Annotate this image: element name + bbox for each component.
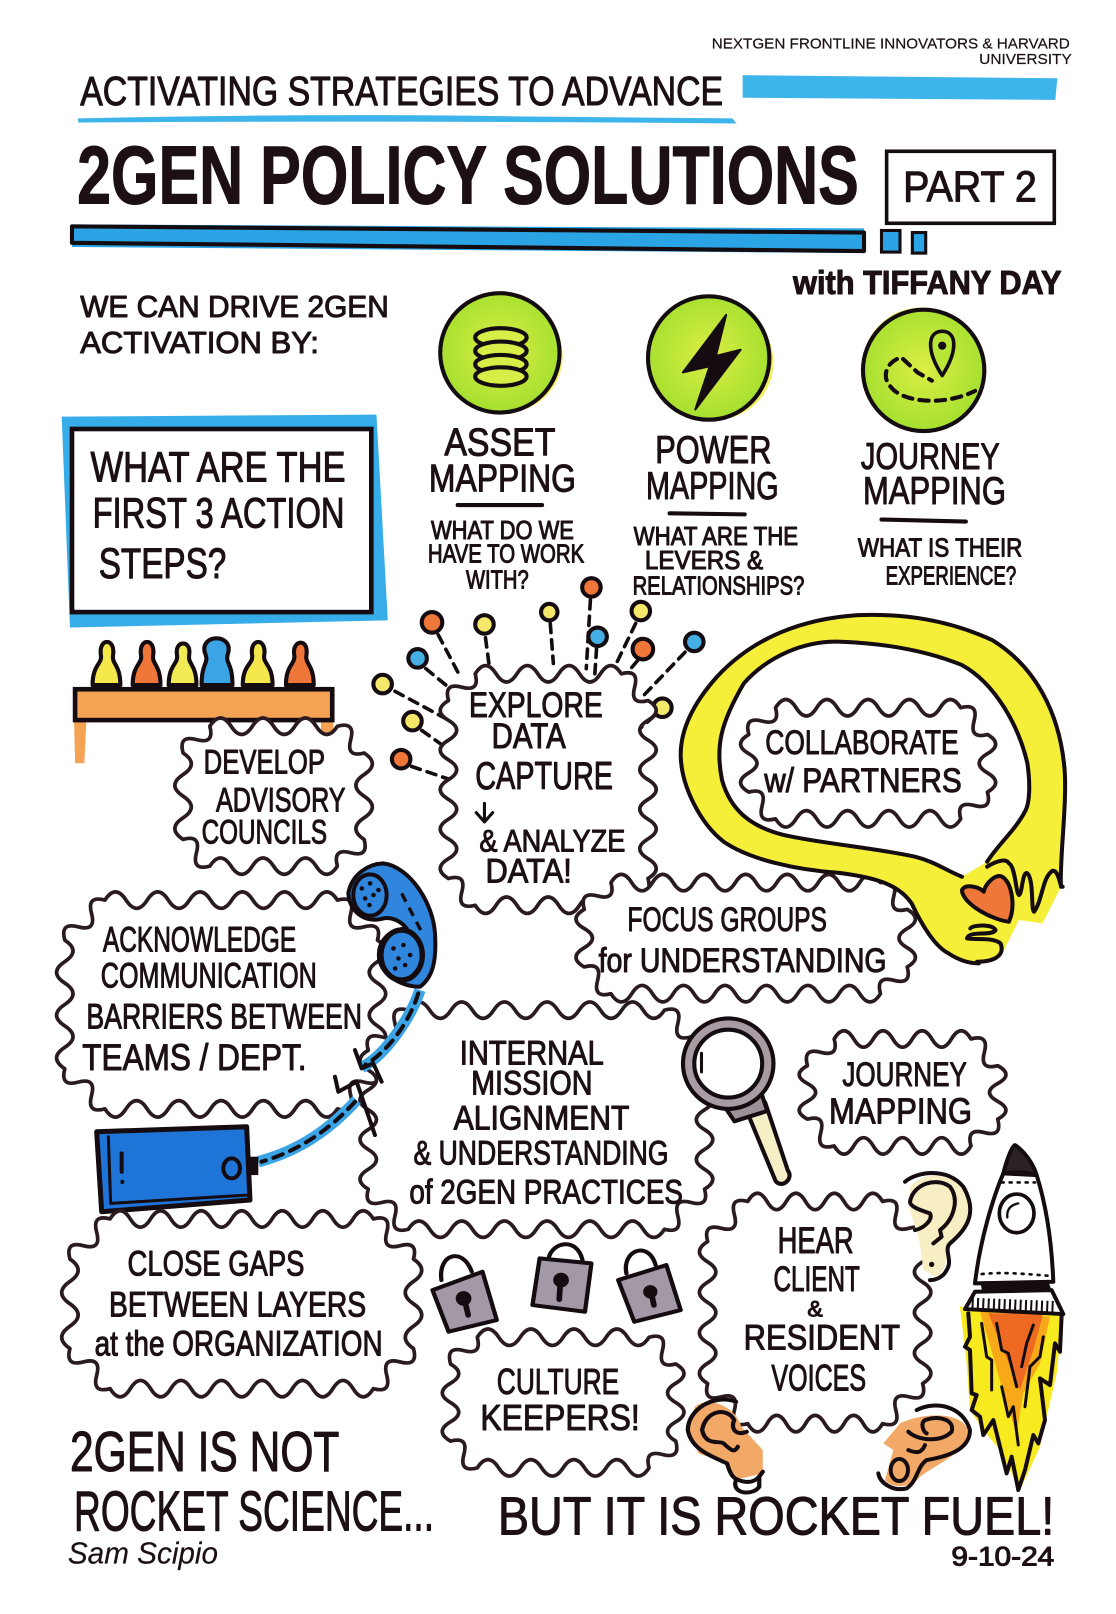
question panel — [62, 415, 388, 628]
callout: journey mapping: MAPPING — [829, 1090, 972, 1131]
callout: acknowledge communication barriers: TEAMS / DEPT. — [82, 1036, 307, 1078]
callout: develop advisory councils — [175, 718, 372, 874]
closing statement — [70, 1420, 1054, 1547]
telephone — [97, 863, 435, 1212]
power mapping text: MAPPING — [646, 465, 779, 508]
icon: rocket with flames — [960, 1145, 1063, 1490]
callout: acknowledge communication barriers: COMMUNICATION — [101, 957, 317, 996]
icon: journey mapping route — [863, 308, 984, 431]
icon: magnifying glass — [683, 1018, 790, 1184]
callout: journey mapping — [799, 1031, 1006, 1154]
intro text: WE CAN DRIVE 2GEN — [80, 289, 389, 324]
question panel: STEPS? — [99, 540, 226, 587]
affiliation note: UNIVERSITY — [979, 52, 1072, 68]
icon: padlocks — [432, 1244, 681, 1332]
icon: cream ear — [905, 1173, 970, 1280]
callout: close gaps between layers: BETWEEN LAYERS — [109, 1286, 366, 1325]
rocket dotted seams — [982, 1182, 1048, 1276]
callout: hear client and resident voices: VOICES — [771, 1357, 866, 1399]
icon: asset mapping coins — [440, 293, 563, 413]
asset mapping text: WHAT DO WE — [431, 517, 574, 545]
callout: collaborate with partners: w/ PARTNERS — [763, 762, 962, 800]
asset mapping text: MAPPING — [429, 458, 576, 501]
presenter credit: with TIFFANY DAY — [792, 264, 1062, 301]
journey mapping text: MAPPING — [863, 470, 1006, 513]
phone base — [97, 1127, 258, 1212]
icon: right orange ear — [878, 1406, 970, 1489]
callout: culture keepers: KEEPERS! — [480, 1397, 640, 1438]
part 2 box — [887, 151, 1054, 223]
rocket skirt — [965, 1283, 1063, 1314]
callout: internal mission alignment: MISSION — [471, 1064, 592, 1102]
callout: hear client and resident voices: CLIENT — [773, 1260, 860, 1299]
rocket nose — [1003, 1145, 1037, 1175]
callout: culture keepers — [442, 1329, 684, 1476]
callout: focus groups — [576, 874, 915, 1002]
callout: acknowledge communication barriers: BARRIERS BETWEEN — [86, 998, 362, 1037]
callout: explore data: EXPLORE — [469, 686, 603, 725]
callout: internal mission alignment: INTERNAL — [460, 1035, 604, 1073]
date: 9-10-24 — [951, 1542, 1054, 1572]
callout: collaborate with partners — [741, 700, 996, 827]
data lollipop dots — [373, 578, 704, 780]
title blue bar — [72, 224, 926, 253]
asset mapping text — [428, 422, 584, 594]
callout: internal mission alignment — [360, 1002, 713, 1237]
affiliation note — [712, 36, 1072, 68]
callout: explore data: DATA! — [485, 853, 572, 891]
callout: acknowledge communication barriers: ACKNOWLEDGE — [103, 921, 296, 960]
icon: left orange ear — [688, 1400, 763, 1493]
closing statement: 2GEN IS NOT — [70, 1420, 339, 1483]
callout: close gaps between layers: CLOSE GAPS — [128, 1245, 304, 1284]
closing statement: BUT IT IS ROCKET FUEL! — [498, 1488, 1054, 1547]
asset mapping text: HAVE TO WORK — [428, 541, 584, 569]
callout: hear client and resident voices: RESIDENT — [744, 1319, 900, 1358]
journey mapping text: WHAT IS THEIR — [858, 535, 1022, 563]
journey mapping text: JOURNEY — [861, 435, 1000, 477]
callout: explore data — [440, 666, 656, 913]
title: 2GEN POLICY SOLUTIONS — [77, 131, 859, 222]
closing statement: ROCKET SCIENCE... — [74, 1480, 434, 1543]
affiliation note: NEXTGEN FRONTLINE INNOVATORS & HARVARD — [712, 36, 1070, 52]
power mapping text: RELATIONSHIPS? — [633, 573, 804, 601]
journey mapping text — [858, 435, 1022, 590]
signature: Sam Scipio — [68, 1536, 218, 1571]
callout: internal mission alignment: ALIGNMENT — [454, 1099, 629, 1137]
callout: develop advisory councils: DEVELOP — [204, 744, 325, 782]
phone cord — [258, 990, 420, 1162]
rocket body — [975, 1173, 1053, 1283]
question panel: WHAT ARE THE — [91, 443, 346, 490]
rocket window — [999, 1194, 1034, 1233]
part 2 box: PART 2 — [903, 164, 1037, 212]
power mapping text: LEVERS & — [645, 547, 763, 575]
callout: hear client and resident voices: HEAR — [778, 1219, 854, 1261]
callout: close gaps between layers — [62, 1211, 422, 1397]
callout: journey mapping: JOURNEY — [842, 1056, 967, 1094]
handset — [348, 863, 435, 987]
callout: internal mission alignment: & UNDERSTANDING — [413, 1134, 669, 1172]
callout: collaborate with partners: COLLABORATE — [765, 724, 959, 762]
asset mapping text: WITH? — [466, 566, 529, 594]
question panel: FIRST 3 ACTION — [93, 490, 345, 537]
blue underline under subtitle — [78, 115, 736, 124]
callout: develop advisory councils: COUNCILS — [202, 814, 327, 852]
callout: close gaps between layers: at the ORGANIZATION — [95, 1325, 383, 1364]
power mapping text: POWER — [655, 429, 771, 472]
callout: culture keepers: CULTURE — [497, 1361, 619, 1402]
callout: develop advisory councils: ADVISORY — [216, 782, 346, 820]
callout: explore data: CAPTURE — [475, 755, 613, 798]
callout: hear client and resident voices: & — [807, 1297, 823, 1322]
callout: internal mission alignment: of 2GEN PRACTICES — [409, 1174, 683, 1212]
callout: acknowledge communication barriers — [57, 892, 386, 1117]
subtitle: ACTIVATING STRATEGIES TO ADVANCE — [80, 68, 723, 114]
power mapping text: WHAT ARE THE — [634, 523, 798, 551]
asset mapping text: ASSET — [444, 422, 555, 465]
intro text — [80, 289, 389, 360]
callout: explore data: & ANALYZE — [479, 823, 625, 859]
flames — [960, 1307, 1063, 1490]
journey mapping text: EXPERIENCE? — [886, 562, 1016, 590]
callout: focus groups: FOCUS GROUPS — [627, 901, 827, 939]
callout: explore data: DATA — [492, 717, 566, 756]
intro text: ACTIVATION BY: — [80, 325, 319, 360]
callout: hear client and resident voices — [699, 1193, 931, 1432]
callout: focus groups: for UNDERSTANDING — [599, 942, 887, 980]
advisory council people and table — [74, 638, 333, 763]
yellow speech bubble with heart — [681, 615, 1065, 963]
icon: power mapping lightning bolt — [648, 296, 773, 420]
decorative blue bar beside subtitle — [743, 75, 1057, 100]
power mapping text — [633, 429, 804, 601]
